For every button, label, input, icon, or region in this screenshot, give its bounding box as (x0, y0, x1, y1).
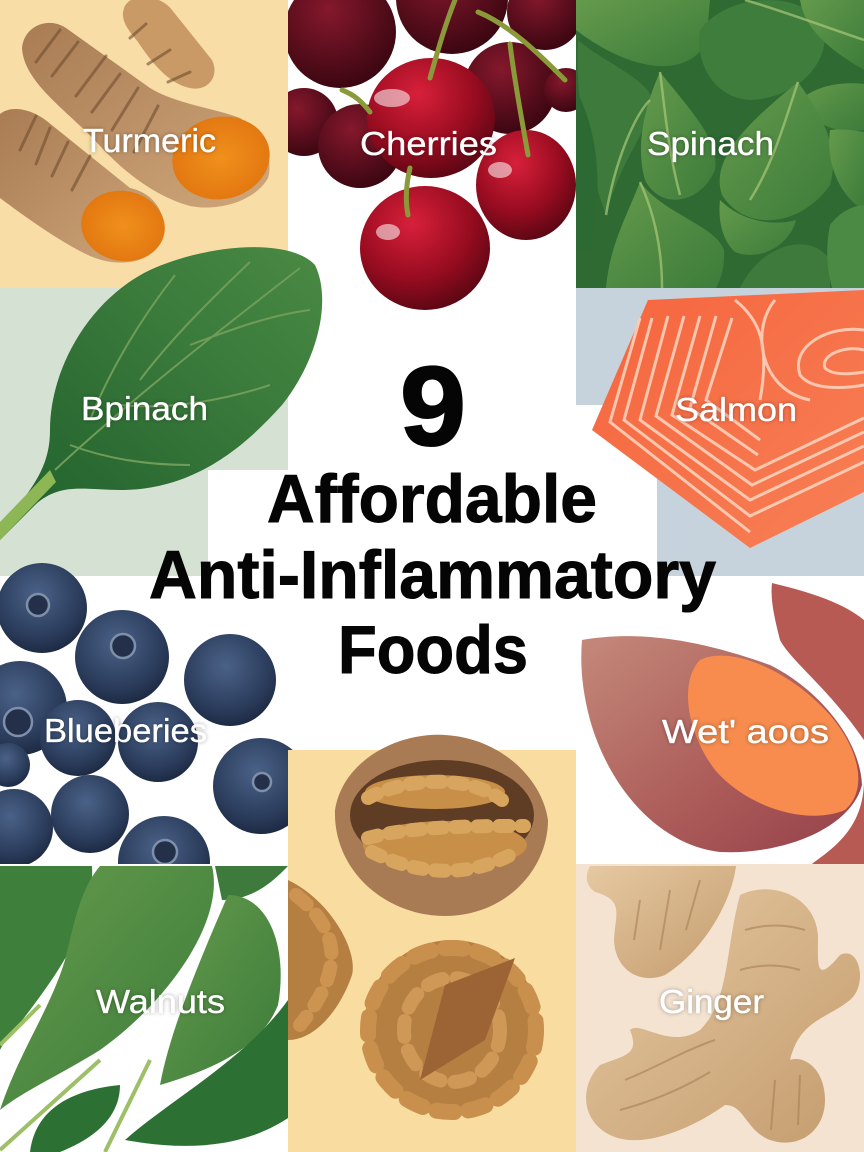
blueberry crowns (4, 594, 271, 864)
icon: dark cherries at back (270, 0, 588, 188)
icon: lower turmeric root (0, 109, 163, 263)
label: turmeric: Turmeric (83, 122, 216, 159)
panel: spinach bottom left (0, 864, 288, 1152)
leaf midribs (606, 0, 864, 288)
root ridges (20, 24, 190, 190)
icon: spinach leaf cluster (576, 0, 864, 288)
title (149, 344, 716, 688)
icon: walnut kernel upper (365, 775, 505, 809)
title line 2: Anti-Inflammatory (149, 537, 716, 613)
icon: walnut half left (288, 880, 353, 1040)
icon: walnut shell interior (350, 760, 534, 844)
icon: sweet potato cut face (688, 656, 858, 816)
icon: front cherries (360, 58, 576, 310)
title number: 9 (400, 344, 466, 469)
label: cherries: Cherries (360, 125, 497, 162)
label: salmon: Salmon (675, 391, 797, 428)
panel: salmon background (576, 288, 864, 576)
label: bpinach: Bpinach (81, 390, 208, 427)
icon: large spinach leaf (0, 247, 322, 540)
label: spinach: Spinach (647, 125, 774, 162)
labels (44, 122, 829, 1020)
icon: back sweet potato (772, 583, 864, 864)
panel: sweet potato (581, 583, 864, 864)
panel: blueberries (0, 563, 293, 864)
salmon fat lines (610, 300, 864, 532)
icon: turmeric cut face (165, 108, 277, 208)
label: ginger: Ginger (659, 983, 764, 1020)
leaf veins (55, 262, 310, 470)
ginger ridges (620, 880, 805, 1130)
icon: walnut kernel lower (363, 821, 527, 871)
icon: ginger top knob (587, 866, 736, 978)
icon: large turmeric root (22, 23, 270, 208)
icon: salmon fillet (592, 290, 864, 548)
icon: small turmeric root (123, 0, 215, 89)
panel: spinach top right (576, 0, 864, 288)
panel: cherries (270, 0, 588, 310)
cherry highlights (374, 89, 512, 240)
label: sweet potato: Wet' aoos (662, 713, 829, 750)
icon: walnut half centre (364, 940, 540, 1116)
panel: walnuts (288, 735, 576, 1152)
title line 1: Affordable (267, 461, 597, 537)
icon: blueberries (0, 563, 293, 864)
icon: lower turmeric cut face (76, 184, 170, 268)
icon: spinach bunch (0, 866, 288, 1152)
label: walnuts: Walnuts (96, 983, 225, 1020)
icon: front sweet potato (581, 636, 862, 852)
spinach stems (0, 1005, 150, 1152)
icon: walnut shell (335, 735, 548, 916)
title line 3: Foods (338, 612, 528, 688)
leaf stem (0, 470, 56, 540)
label: blueberries: Blueberies (44, 712, 207, 749)
panel: turmeric (0, 0, 288, 288)
panel: ginger (576, 864, 864, 1152)
panel: pale green background (0, 288, 288, 576)
cherry stems (342, 0, 565, 215)
icon: ginger root (586, 889, 860, 1143)
